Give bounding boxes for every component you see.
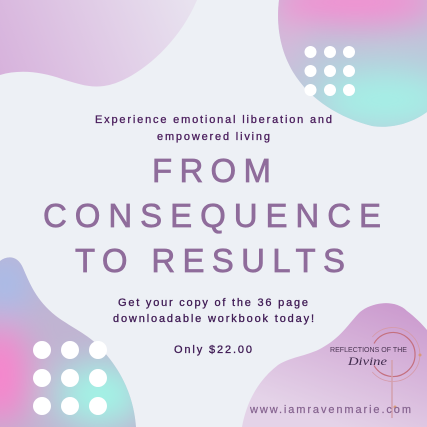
heading: TO RESULTS [75, 242, 345, 279]
heading: CONSEQUENCE [43, 197, 381, 234]
blob: bottom left [0, 250, 144, 427]
blob: top left [0, 0, 197, 87]
logo: Reflections of the Divine [330, 328, 422, 418]
subtitle: Experience emotional liberation and [95, 114, 332, 126]
blob: top right [278, 0, 427, 127]
blob: bottom right [242, 303, 427, 427]
workbook text: downloadable workbook today! [113, 313, 314, 325]
workbook text [113, 297, 314, 325]
heading: FROM [152, 152, 271, 189]
subtitle [95, 114, 332, 143]
logo: Reflections of the Divine: Divine [347, 354, 388, 368]
dot grid: top right [304, 46, 355, 96]
subtitle: empowered living [157, 131, 270, 143]
logo: Reflections of the Divine: REFLECTIONS OF THE [330, 345, 407, 354]
price: Only $22.00 [174, 344, 252, 356]
website: www.iamravenmarie.com [249, 404, 411, 416]
heading [43, 152, 381, 279]
dot grid: bottom left [33, 341, 107, 415]
workbook text: Get your copy of the 36 page [118, 297, 308, 309]
